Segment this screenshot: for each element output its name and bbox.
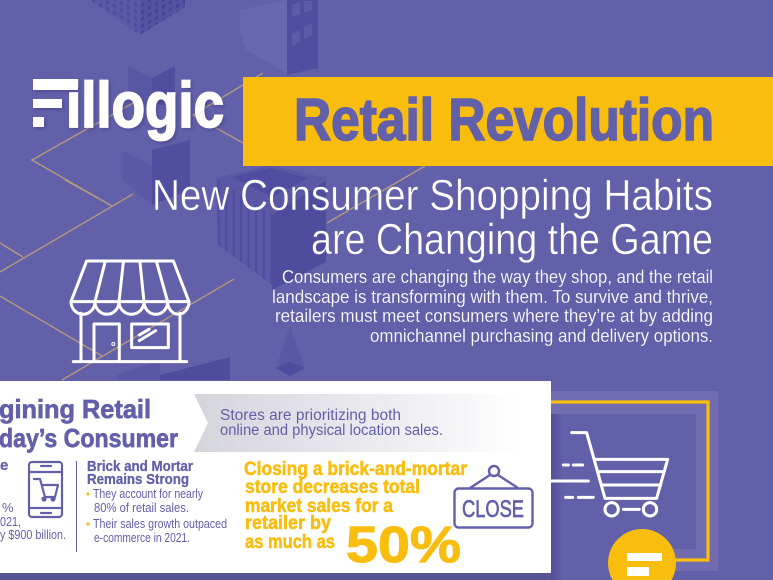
panel heading: gining Retail [0, 394, 151, 424]
title banner [243, 77, 773, 166]
statistic callout: as much as [245, 531, 335, 553]
statistic callout [244, 458, 467, 573]
subtitle: New Consumer Shopping Habits [152, 171, 713, 220]
icon: shopping cart [551, 433, 668, 516]
panel shadow [551, 414, 563, 580]
grey callout [194, 394, 520, 452]
intro paragraph [272, 266, 713, 346]
statistic callout: retailer by [245, 512, 331, 534]
white content panel [0, 381, 551, 573]
icon: close sign [454, 466, 532, 528]
title banner: Retail Revolution [294, 87, 714, 153]
background: road lines [0, 73, 425, 380]
brick and mortar column [86, 458, 227, 545]
statistic callout: 50% [346, 516, 461, 573]
logo: Fillogic: illogic [66, 69, 224, 141]
brick and mortar column: They account for nearly [93, 486, 203, 501]
panel heading [0, 394, 178, 453]
icon: close sign: CLOSE [462, 496, 524, 523]
subtitle: are Changing the Game [311, 215, 713, 264]
grey callout: Stores are prioritizing both [220, 407, 401, 424]
left column cut-off text [0, 457, 66, 542]
left column cut-off text: y $900 billion. [0, 527, 66, 542]
brick and mortar column: 80% of retail sales. [94, 500, 189, 515]
subtitle [152, 171, 713, 264]
statistic callout: store decreases total [245, 476, 420, 498]
cart panel frame [550, 391, 718, 571]
intro paragraph: omnichannel purchasing and delivery options. [370, 325, 713, 346]
panel heading: day’s Consumer [0, 423, 178, 453]
intro paragraph: landscape is transforming with them. To survive and thrive, [272, 286, 713, 307]
statistic callout: Closing a brick-and-mortar [244, 458, 467, 480]
intro paragraph: retailers must meet consumers where they’re at by adding [275, 305, 713, 326]
brick and mortar column: Remains Strong [87, 471, 189, 488]
statistic callout: market sales for a [245, 495, 393, 517]
grey callout: online and physical location sales. [220, 422, 443, 439]
intro paragraph: Consumers are changing the way they shop, and the retail [282, 266, 713, 287]
brick and mortar column: e-commerce in 2021. [94, 530, 190, 545]
left column cut-off text: e [0, 457, 8, 474]
left column cut-off text: % [2, 500, 14, 515]
brick and mortar column: Their sales growth outpaced [93, 516, 227, 531]
icon: phone with cart [29, 462, 62, 517]
divider [76, 461, 77, 552]
icon: storefront [71, 261, 189, 362]
background: isometric city [90, 0, 326, 380]
brick and mortar column: Brick and Mortar [87, 458, 193, 475]
logo badge circle [608, 529, 676, 580]
bottom panel strip [0, 573, 551, 580]
